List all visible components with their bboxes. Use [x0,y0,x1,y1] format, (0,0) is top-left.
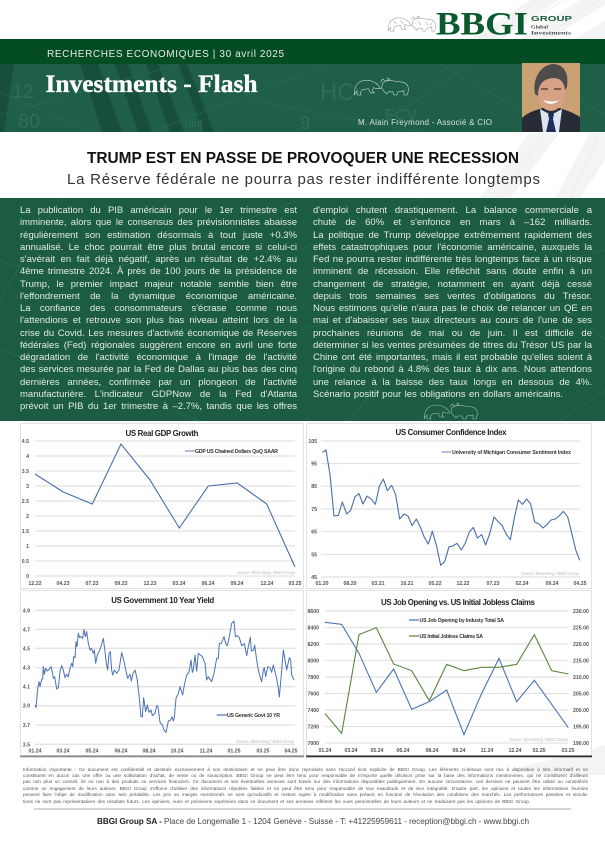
chart: US Government 10 Year Yield [20,590,304,758]
text column: right: prochaines réunions de mai ou de juin. Il est difficile de [313,328,592,339]
chart title: US Consumer Confidence Index [396,428,507,437]
text column: right: Fed ne pourra rester indifférente très longtemps face à un risque [313,254,592,265]
x axis: 03.25 [562,748,575,754]
footer contact: BBGI Group SA - Place de Longemalle 1 - 1204 Genève - Suisse - T: +41225959611 - reception@bbgi.ch - www.bbgi.ch [97,817,529,826]
header band [0,39,605,133]
text column: left: dégradation de l'activité économique à l'image de l'activité [20,352,297,363]
left y axis: 7200 [307,724,319,730]
y axis: 1 [26,544,29,550]
text column: right: une relance à la baisse des taux longs en dessous de 4%. [313,377,592,388]
text column: right: chuté de 60% et s'enfonce en mars à –162 milliards. [313,217,592,228]
text column: right [313,205,592,400]
header band: HC [320,79,355,106]
icon: bear and bull white [354,78,408,95]
left y axis: 8000 [307,658,319,664]
left y axis: 8600 [307,609,319,615]
legend: US Generic Govt 10 YR [227,713,280,719]
chart: US Real GDP Growth [20,423,304,589]
left y axis: 7400 [307,708,319,714]
x axis: 09.24 [453,748,466,754]
y axis: 4.9 [23,608,30,614]
chart title: US Job Opening vs. US Initial Jobless Claims [381,598,536,607]
y axis: 3 [26,484,29,490]
left y axis: 8200 [307,642,319,648]
left y axis [307,609,319,747]
x axis: 01.25 [228,748,241,754]
icon: bear and bull [388,16,436,31]
header band: FCV [385,107,417,124]
x axis: 04.25 [285,748,298,754]
text column: right: La politique de Trump développe extrêmement rapidement des [313,230,592,241]
x axis: 06.24 [115,748,128,754]
x axis: 07.23 [86,581,99,587]
header band: 9 [300,113,310,133]
y axis: 3.7 [23,723,30,729]
y axis: 4.7 [23,627,30,633]
publication title: Investments - Flash [46,71,258,98]
y axis: 4.1 [23,685,30,691]
right y axis: 215.00 [573,658,589,664]
x axis: 12.22 [457,581,470,587]
x axis: 06.24 [202,581,215,587]
text column: left: manufacturière. L'indicateur GDPNow de la Fed d'Atlanta [20,389,297,400]
x axis: 12.24 [509,748,522,754]
right y axis: 210.00 [573,675,589,681]
legend: University of Michigan Consumer Sentiment Index [452,450,571,456]
source note: Source: Bloomberg / BBGI Group [521,571,580,576]
logo: BBGI Group [388,6,573,42]
text column: left: annualisé. Le choc pourrait être plus brutal encore si celui-ci [20,242,297,253]
y axis: 3.5 [22,469,29,475]
text column: right: d'emploi chutent drastiquement. La balance commerciale a [313,205,592,216]
legend: jobless claims: US Initial Jobless Claims SA [420,634,483,640]
x axis: 03.24 [173,581,186,587]
legal disclaimer: pas non plus un conseil, lié ou non à des produits ou services financiers. Ce document et ses éventuelles annexes sont basés sur des informations disponibles publiquement. En aucune circonstance, ces derniers ne peuvent être utilisé ou considérés [23,779,588,784]
header band: 12 [12,81,34,103]
x axis: 10.24 [171,748,184,754]
data line [322,450,580,565]
legend: job openings: US Job Opening by Industy Total SA [420,618,504,624]
x axis: 07.23 [487,581,500,587]
x axis [316,581,587,587]
text column: right: Nous estimons qu'elle n'aura pas le choix de relancer un QE en [313,303,592,314]
x axis: 04.23 [57,581,70,587]
y axis: 4 [26,454,29,460]
y axis: 85 [311,484,317,490]
text column: left: La confiance des consommateurs s'écrase comme nous [20,303,297,314]
text column: right: effets catastrophiques pour l'économie américaine, auxquels la [313,242,592,253]
left y axis: 7000 [307,741,319,747]
chart: US Job Opening vs. US Initial Jobless Claims [306,590,592,758]
logo: BBGI Group: Global [531,24,548,30]
x axis [29,581,302,587]
text column: left: dernières années, confirmée par un plongeon de l'activité [20,377,297,388]
source note: Source: Bloomberg / BBGI Group [509,737,569,742]
text column: left: 4ème trimestre 2024. À près de 100 jours de la présidence de [20,266,297,277]
x axis: 04.25 [574,581,587,587]
legal disclaimer: constituent en aucun cas une offre ou une sollicitation d'achat, de vente ou de souscription. BBGI Group ne peut être tenu pour responsable de n'importe quelle décision prise sur la base des informations mentionnées, qui ne constituent d'ailleurs [23,773,588,778]
chart title: US Government 10 Year Yield [111,596,214,605]
y axis [22,439,29,580]
right y axis: 220.00 [573,642,589,648]
header band: ulut [185,118,203,130]
x axis: 03.25 [289,581,302,587]
x axis: 08.24 [143,748,156,754]
right y axis: 230.00 [573,609,589,615]
text column: left: prévoit un PIB du 1er trimestre à –2.7%, tandis que les offres [20,401,297,412]
x axis: 12.23 [144,581,157,587]
chart title: US Real GDP Growth [126,429,199,438]
x axis: 08.24 [426,748,439,754]
data line: jobless claims [325,628,568,733]
panel: commentary [0,198,605,421]
right y axis: 195.00 [573,724,589,730]
text column: left: l'effondrement de la dynamique économique américaine. [20,291,297,302]
text column: right: l'origine du rebond à 4.8% des taux à dix ans. Nous attendons [313,364,592,375]
right y axis: 200.00 [573,708,589,714]
y axis: 3.5 [23,742,30,748]
text column: left: imminente, alors que le consensus des prévisionnistes abaisse [20,217,297,228]
text column: left: s'avérait en fait déjà négatif, après un résultat de +2.4% au [20,254,297,265]
x axis: 09.23 [115,581,128,587]
icon: bear and bull in commentary [424,402,478,420]
x axis [29,748,298,754]
x axis: 01.20 [316,581,329,587]
text column: right: déterminer si les ventes présumées de titres du Trésor US par la [313,340,592,351]
legend: GDP US Chained Dollars QoQ SAAR [195,449,278,455]
logo: BBGI Group: BBGI [436,6,528,42]
text column: left: Trump, le premier impact majeur notable semble bien être [20,279,297,290]
text column: left: régulièrement son estimation désormais à tout juste +0.3% [20,230,297,241]
x axis: 12.22 [29,581,42,587]
y axis: 4.5 [23,646,30,652]
text column: right: Chine ont été importantes, mais il est probable qu'elles soient à [313,352,592,363]
data line [35,621,294,732]
y axis: 55 [311,552,317,558]
y axis: 3.9 [23,704,30,710]
y axis: 4.3 [23,666,30,672]
x axis [319,748,575,754]
x axis: 03.25 [257,748,270,754]
y axis: 0.5 [22,559,29,565]
y axis: 65 [311,530,317,536]
y axis: 75 [311,507,317,513]
right y axis: 225.00 [573,626,589,632]
x axis: 12.24 [261,581,274,587]
text column: left: La publication du PIB américain pour le 1er trimestre est [20,205,297,216]
source note: Source: Bloomberg / BBGI Group [237,570,296,575]
data line [35,444,295,567]
left y axis: 7800 [307,675,319,681]
x axis: 01.24 [29,748,42,754]
x axis: 01.24 [319,748,332,754]
logo: BBGI Group: Investments [531,30,572,36]
legal disclaimer [23,766,588,804]
text column: right: depuis trois semaines ses ventes d'obligations du Trésor. [313,291,592,302]
x axis: 06.24 [397,748,410,754]
right y axis: 190.00 [573,741,589,747]
author name: M. Alain Freymond - Associé & CIO [358,118,492,127]
x axis: 11.24 [481,748,493,754]
x axis: 05.22 [429,581,442,587]
x axis: 02.24 [516,581,529,587]
y axis [308,439,317,581]
text column: left: des services mesurée par la Fed de Dallas au plus bas des cinq [20,364,297,375]
chart: US Consumer Confidence Index [306,423,592,589]
right y axis: 205.00 [573,692,589,698]
x axis: 03.24 [57,748,70,754]
x axis: 03.24 [345,748,358,754]
y axis: 4.5 [22,439,29,445]
x axis: 09.24 [546,581,559,587]
y axis: 0 [26,574,29,580]
x axis: 10.21 [401,581,414,587]
y axis: 95 [311,462,317,468]
y axis: 2 [26,514,29,520]
logo: BBGI Group: GROUP [531,16,573,23]
y axis: 45 [311,575,317,581]
text column: left: l'attendions et retrouve son plus bas niveau atteint lors de la [20,315,297,326]
text column: right: changement de stratégie, notamment en ayant déjà cessé [313,279,592,290]
text column: left [20,205,298,412]
text column: right: Scénario positif pour les obligations en dollars américains. [313,389,563,400]
y axis: 105 [308,439,317,445]
footer rule [34,808,571,810]
left y axis: 7600 [307,692,319,698]
portrait photo [522,63,580,132]
source note: Source: Bloomberg / BBGI Group [236,739,295,744]
subheadline: La Réserve fédérale ne pourra pas rester indifférente longtemps [67,171,540,188]
data line: job openings [325,622,568,735]
legal disclaimer: Information importante : Ce document est confidentiel et destinés exclusivement à son destinataire et ne peut être donc reproduits sans l'accord écrit explicite de BBGI Group. Les éléments ci-dessus sont mis à disposition à titre informatif et ne [23,766,588,772]
text column: right: mai et d'abaisser ses taux directeurs au cours de l'une de ses [313,315,592,326]
main headline: TRUMP EST EN PASSE DE PROVOQUER UNE RECESSION [87,150,519,167]
legal disclaimer: peuvent faire l'objet de modification sans avis préalable. Les prix ou marges mentionnés ne sont qu'indicatifs et restent sujets à modification sans préavis en fonction de l'évolution des conditions des marchés. Les performances passées et simula- [23,792,588,797]
text column: right: imminent de récession. Elle réfléchit sans doute enfin à un [313,266,592,277]
x axis: 08.20 [344,581,357,587]
x axis: 02.25 [533,748,546,754]
x axis: 05.24 [86,748,99,754]
x axis: 03.21 [372,581,385,587]
x axis: 05.24 [371,748,384,754]
section label and date: RECHERCHES ECONOMIQUES | 30 avril 2025 [47,49,284,60]
x axis: 09.24 [231,581,244,587]
left y axis: 8400 [307,626,319,632]
y axis [23,608,30,748]
legal disclaimer: comme un engagement de leurs auteurs. BBGI Group s'efforce d'utiliser des informations réputées fiables et ne peut être tenu pour responsable de leur exactitude et de leur intégralité. D'autre part, les opinions et toutes les informations fournies [23,786,588,791]
x axis: 11.24 [200,748,212,754]
y axis: 2.5 [22,499,29,505]
y axis: 1.5 [22,529,29,535]
legal disclaimer: tions ne sont pas représentatives des résultats futurs. Les opinions, vues et prévisions exprimées dans ce document et ses annexes reflètent les vues personnelles de leurs auteurs et ne traduisent pas les opinions de BBGI Group. [23,799,530,804]
text column: left: fédérales (Fed) régionales suggèrent encore en avril une forte [20,340,297,351]
text column: left: crise du Covid. Les mesures d'activité économique de Réserves [20,328,297,339]
right y axis [573,609,589,747]
header band: 80 [18,111,40,133]
